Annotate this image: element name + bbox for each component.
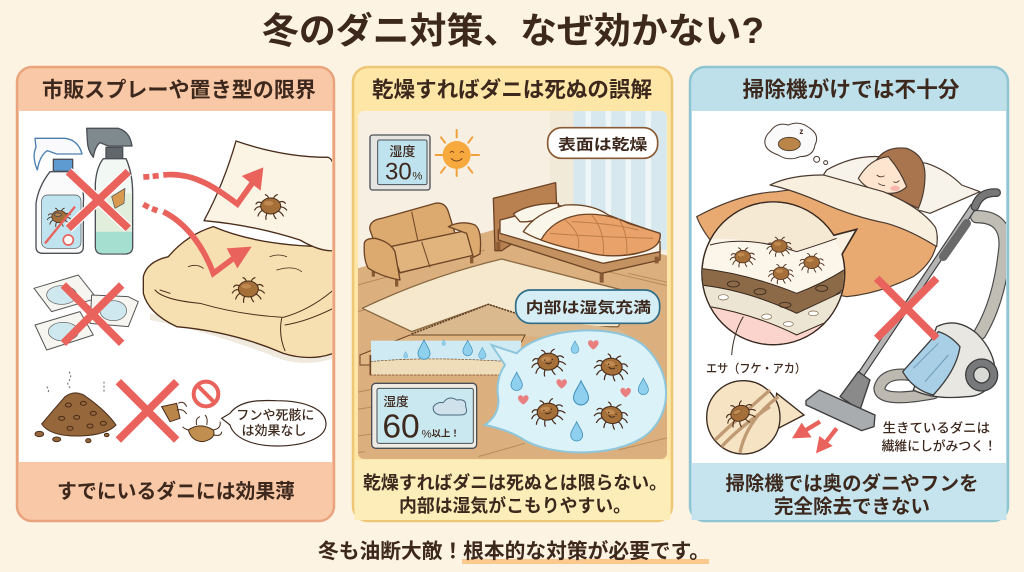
mite on quilt [232, 278, 264, 302]
panel 2 frame [353, 67, 672, 521]
magnified fabric layers [700, 200, 857, 347]
hearts [518, 340, 631, 405]
vacuum pipe [855, 193, 997, 383]
mites in fabric [730, 237, 824, 284]
panel: commercial sprays and traps [17, 67, 334, 521]
vacuum nozzle [806, 372, 875, 431]
underfloor moisture layer [370, 341, 521, 375]
panel 1 caption: すでにいるダニには効果薄 [57, 479, 295, 503]
curtain [550, 110, 670, 250]
pillow [204, 141, 333, 251]
panel 2 caption: 乾燥すればダニは死ぬとは限らない。 [363, 472, 667, 493]
hygrometer 60%: % [422, 428, 432, 440]
panel 2 caption: 内部は湿気がこもりやすい。 [399, 495, 631, 516]
panel 3 artwork [697, 123, 1005, 454]
icon: sachets [34, 275, 138, 350]
hygrometer 60%: 以上！ [432, 428, 460, 439]
dead mite husk [183, 415, 222, 442]
panel 2 footer band [354, 460, 670, 520]
panel 2 caption [363, 472, 667, 516]
food pointer line [732, 317, 743, 355]
hygrometer 30%: 30 [385, 158, 412, 185]
speech bubble: フンや死骸に [236, 407, 314, 422]
panel 3 illustration area [692, 111, 1006, 463]
panel: dry air misconception [352, 67, 672, 521]
panel: vacuum not enough [690, 67, 1008, 521]
speech bubble [222, 400, 326, 446]
icon: prohibition sign [194, 382, 218, 406]
icon: smiling sun [436, 130, 479, 176]
red cross over droppings [118, 382, 177, 440]
callout: surface dry [548, 128, 658, 158]
pillow [823, 156, 980, 213]
callout: humid inside: 内部は湿気充満 [526, 299, 651, 317]
speech bubble: は効果なし [242, 423, 306, 438]
quilt [143, 227, 333, 363]
sleeping woman [858, 148, 925, 208]
hygrometer 60%: 60 [382, 408, 420, 445]
icon: green spray bottle [87, 128, 133, 254]
arrow: pushed down 1 [792, 422, 820, 438]
bottom message: 冬も油断大敵！根本的な対策が必要です。 [318, 539, 710, 563]
mites cling note: 生きているダニは [883, 421, 990, 436]
magnified bubble of mites [485, 330, 666, 452]
floor cut [360, 335, 525, 365]
vacuum hose [879, 217, 1005, 397]
thought bubble: z [799, 127, 803, 136]
smiling mites [529, 348, 631, 432]
panel 1 illustration area [19, 111, 333, 462]
water drops [404, 340, 486, 359]
thought bubble [765, 123, 828, 165]
callout: surface dry: 表面は乾燥 [558, 135, 647, 153]
futon [697, 175, 937, 297]
icon: droppings pile [35, 372, 116, 443]
vacuum canister [903, 323, 998, 397]
arrow: pushed down 2 [816, 428, 837, 453]
panel 3 caption [726, 472, 978, 518]
title: 冬のダニ対策、なぜ効かない? [262, 10, 764, 51]
dead mite fragment [162, 402, 187, 422]
panel 2 illustration area [352, 110, 672, 463]
magnified fibre circle [707, 381, 804, 454]
panel 3 caption: 完全除去できない [774, 496, 930, 518]
food label: エサ（フケ・アカ） [706, 361, 806, 375]
panel 1 heading: 市販スプレーや置き型の限界 [42, 79, 316, 102]
panel 3 caption: 掃除機では奥のダニやフンを [726, 472, 978, 495]
panel 3 heading: 掃除機がけでは不十分 [742, 77, 960, 102]
panel 1 artwork [34, 128, 333, 446]
red cross over vacuum [877, 278, 937, 338]
panel 2 artwork [352, 110, 672, 463]
icon: blue spray bottle [34, 138, 84, 253]
sofa [364, 203, 481, 287]
hygrometer 30%: % [412, 170, 422, 182]
arrow: to pillow [143, 167, 263, 204]
rug [362, 259, 635, 332]
mite on pillow [255, 195, 287, 219]
bubble droplets [511, 341, 648, 441]
bottom highlight [462, 559, 709, 564]
panel 3 footer band [692, 463, 1006, 520]
floor [352, 230, 672, 463]
panel 3 frame [690, 67, 1008, 521]
mites cling note [882, 421, 997, 454]
bed [493, 183, 660, 283]
panel 2 heading: 乾燥すればダニは死ぬの誤解 [372, 77, 652, 102]
panel 1 footer band [18, 462, 332, 466]
hygrometer 60%: 湿度 [383, 394, 409, 409]
hygrometer 30% [370, 135, 430, 190]
callout: humid inside [516, 290, 660, 323]
arrow: to quilt [143, 204, 252, 273]
mites cling note: 繊維にしがみつく！ [882, 439, 997, 454]
red cross over sprays [68, 172, 128, 228]
red cross over sachets [63, 285, 122, 343]
panel 1 frame [17, 67, 334, 521]
carpet cross-section [411, 304, 628, 336]
hygrometer 60% [372, 383, 477, 448]
hygrometer 30%: 湿度 [389, 144, 415, 159]
